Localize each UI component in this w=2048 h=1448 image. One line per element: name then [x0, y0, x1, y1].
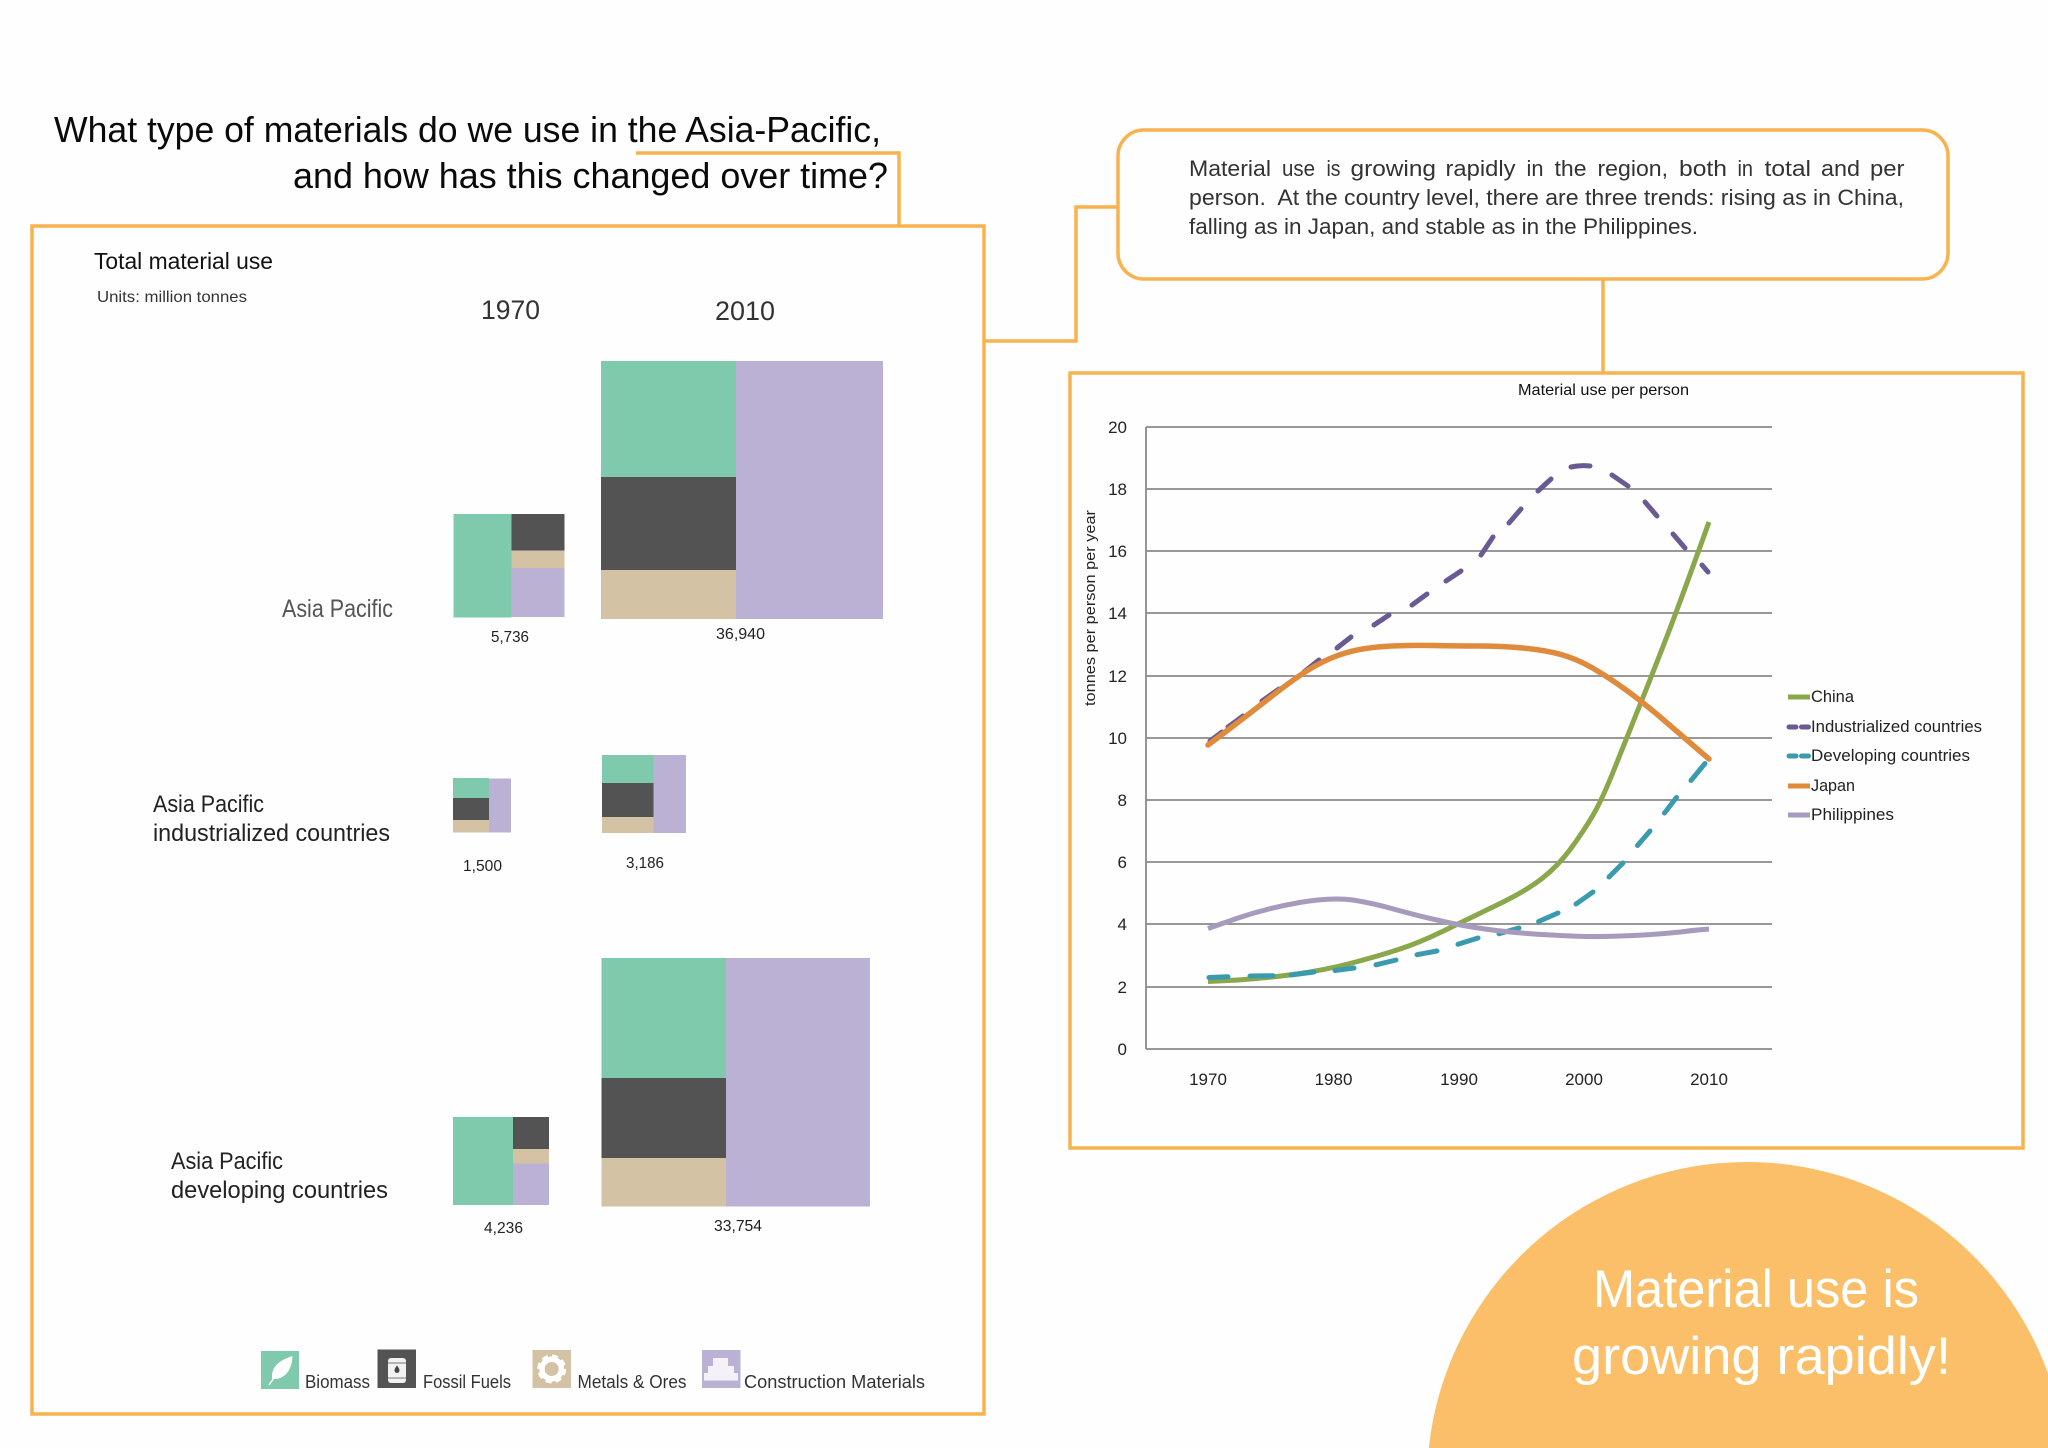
row label: Asia Pacific industrialized countries: industrialized countries: [153, 820, 390, 847]
callout: summary text: falling as in Japan, and stable as in the Philippines.: [1189, 214, 1698, 239]
callout: summary text: is: [1326, 156, 1340, 181]
row label: Asia Pacific developing countries: developing countries: [171, 1177, 388, 1204]
legend label: metals and ores: Metals & Ores: [578, 1372, 686, 1392]
y axis labels: 6: [1118, 853, 1127, 872]
callout: summary text: rapidly: [1446, 156, 1516, 181]
y axis labels: 2: [1118, 978, 1127, 997]
legend label: biomass: Biomass: [305, 1372, 370, 1392]
y axis labels: 20: [1108, 418, 1127, 437]
x axis labels: 1980: [1315, 1070, 1352, 1089]
callout circle: key message: [1429, 1162, 2048, 1448]
callout: summary text: in: [1738, 156, 1753, 181]
row label: Asia Pacific developing countries: Asia Pacific: [171, 1148, 283, 1175]
y axis labels: 8: [1118, 791, 1127, 810]
x axis labels: 1990: [1440, 1070, 1478, 1089]
value: 4,236: 4,236: [484, 1220, 523, 1237]
y axis labels: 18: [1108, 480, 1127, 499]
connector: title to left panel: [636, 153, 899, 226]
y axis labels: 12: [1108, 667, 1127, 686]
chart title: Material use per person: [1518, 382, 1689, 399]
icon: biomass leaf: [261, 1351, 299, 1389]
value: 1,500: 1,500: [463, 858, 502, 875]
treemap: Asia Pacific 1970: [454, 514, 564, 618]
column heading 1970: 1970: [481, 295, 540, 325]
callout: summary text: the: [1554, 156, 1586, 181]
title: What type of materials do we use in the Asia-Pacific,: [54, 109, 881, 150]
icon: metals gear: [532, 1350, 571, 1388]
callout: summary text: region,: [1598, 156, 1668, 181]
y axis labels: 14: [1108, 604, 1127, 623]
title: [54, 109, 888, 196]
y axis labels: 16: [1108, 542, 1127, 561]
connector: callout to chart panel: [1601, 279, 1605, 372]
treemap: industrialized 2010: [602, 755, 686, 833]
chart legend: Developing countries: [1811, 747, 1970, 765]
x axis labels: 2000: [1565, 1070, 1603, 1089]
line: China: [1208, 522, 1709, 982]
units note: Units: million tonnes: [97, 289, 247, 306]
treemap: Asia Pacific 2010: [601, 361, 883, 619]
callout: summary text: person. At the country level, there are three trends: rising as in China,: [1189, 185, 1904, 210]
treemap: developing 2010: [602, 958, 870, 1206]
y axis title: tonnes per person per year: [1082, 510, 1099, 706]
y axis labels: 10: [1108, 729, 1127, 748]
line: Japan: [1208, 645, 1709, 759]
line: Industrialized countries: [1210, 466, 1708, 741]
callout: summary text: and: [1821, 156, 1860, 181]
treemap: developing 1970: [453, 1117, 549, 1205]
legend: material types: [261, 1350, 925, 1392]
panel: material use per person chart: [1070, 373, 2023, 1148]
chart legend: [1788, 688, 1982, 824]
value: 36,940: 36,940: [716, 626, 765, 643]
value: 3,186: 3,186: [626, 855, 664, 872]
x axis labels: 1970: [1189, 1070, 1227, 1089]
row label: Asia Pacific industrialized countries: Asia Pacific: [153, 791, 264, 818]
callout: summary text: both: [1679, 156, 1727, 181]
chart legend: Philippines: [1811, 806, 1894, 824]
x axis labels: 2010: [1690, 1070, 1728, 1089]
panel: total material use: [32, 226, 984, 1414]
y axis labels: 0: [1118, 1040, 1127, 1059]
title: and how has this changed over time?: [293, 155, 888, 196]
value: 33,754: 33,754: [714, 1218, 762, 1235]
chart legend: Japan: [1811, 777, 1855, 795]
column heading 2010: 2010: [715, 296, 775, 326]
line: Philippines: [1208, 899, 1709, 937]
chart legend: China: [1811, 688, 1855, 706]
icon: fossil fuel barrel: [378, 1350, 416, 1388]
callout: summary text: Material: [1189, 156, 1271, 181]
chart legend: Industrialized countries: [1811, 718, 1982, 736]
grid lines and axes: [1146, 427, 1772, 1049]
treemap: industrialized 1970: [453, 778, 511, 832]
icon: construction blocks: [702, 1350, 740, 1388]
legend label: fossil fuels: Fossil Fuels: [423, 1372, 511, 1392]
callout: summary text: total: [1764, 156, 1811, 181]
callout: summary text: [1118, 130, 1948, 279]
row label: Asia Pacific developing countries: [171, 1148, 388, 1204]
callout: summary text: growing: [1350, 156, 1436, 181]
y axis labels: 4: [1118, 915, 1127, 934]
callout circle: key message: growing rapidly!: [1572, 1327, 1951, 1386]
callout: summary text: use: [1282, 156, 1315, 181]
callout: summary text: per: [1870, 156, 1904, 181]
callout circle: key message: Material use is: [1593, 1260, 1919, 1319]
row label: Asia Pacific industrialized countries: [153, 791, 390, 847]
row label: Asia Pacific: Asia Pacific: [282, 595, 393, 623]
y axis labels: [1108, 418, 1127, 1059]
value: 5,736: 5,736: [491, 629, 529, 646]
x axis labels: [1189, 1070, 1728, 1089]
line: Developing countries: [1209, 764, 1705, 978]
connector: left panel to callout: [984, 207, 1118, 341]
panel heading: Total material use: [94, 248, 273, 274]
callout: summary text: in: [1526, 156, 1544, 181]
legend label: construction materials: Construction Materials: [744, 1372, 925, 1392]
